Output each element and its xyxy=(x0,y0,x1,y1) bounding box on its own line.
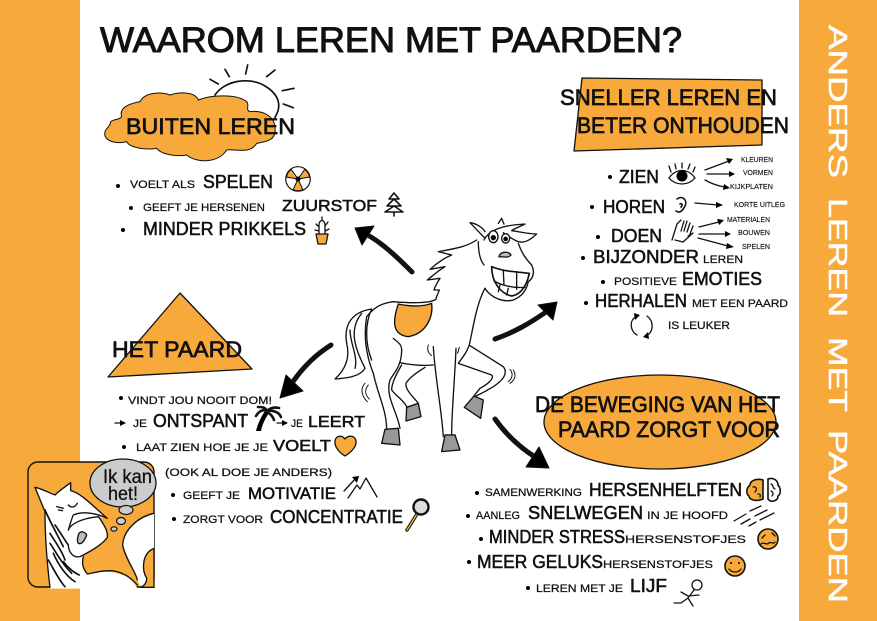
item: doen xyxy=(596,215,770,251)
item: zien: KLEUREN xyxy=(741,155,773,164)
arrow: to het paard xyxy=(280,345,331,398)
item: bijzonder leren: BIJZONDER xyxy=(593,247,699,267)
orange rounded box xyxy=(28,462,154,587)
panel: ik kan het xyxy=(28,459,156,589)
item: zien: KIJKPLATEN xyxy=(730,182,773,191)
cloud shape xyxy=(105,93,275,161)
item: horen xyxy=(590,197,785,217)
item: doen: BOUWEN xyxy=(738,228,770,237)
item: spelen: SPELEN xyxy=(203,172,273,192)
item: hersenhelften: HERSENHELFTEN xyxy=(589,480,742,500)
item: motivatie: GEEFT JE xyxy=(183,490,240,502)
item: horen: HOREN xyxy=(603,197,665,217)
item: lijf xyxy=(526,576,702,606)
item: voelt: LAAT ZIEN HOE JE JE xyxy=(136,442,268,454)
item: minder prikkels: MINDER PRIKKELS xyxy=(143,219,306,239)
item: herhalen: HERHALEN xyxy=(595,291,687,311)
item: concentratie: CONCENTRATIE xyxy=(270,507,403,527)
horse motion lines xyxy=(362,345,515,402)
vertical title: PAARDEN xyxy=(823,430,851,603)
horse saddle patch xyxy=(395,303,432,337)
vertical title xyxy=(823,25,851,603)
item: snelwegen: SNELWEGEN xyxy=(528,503,643,523)
item: zien: ZIEN xyxy=(619,167,659,187)
small horse xyxy=(35,483,154,589)
item: ontspant: ONTSPANT xyxy=(153,411,248,431)
item: doen: SPELEN xyxy=(742,242,770,251)
heading line 2: BETER ONTHOUDEN xyxy=(577,113,789,138)
item: snelwegen: AANLEG xyxy=(476,510,520,522)
item: bijzonder leren: LEREN xyxy=(703,254,743,266)
item: zuurstof: ZUURSTOF xyxy=(282,198,377,215)
item: zuurstof xyxy=(129,193,403,216)
item: positieve emoties: EMOTIES xyxy=(682,269,762,289)
vertical title: ANDERS xyxy=(823,25,851,178)
item: horen: KORTE UITLEG xyxy=(734,200,785,209)
orange quadrilateral xyxy=(574,78,762,151)
vertical title: MET xyxy=(823,337,851,412)
thought bubble: het! xyxy=(108,484,138,505)
item: herhalen xyxy=(584,291,788,339)
item: nooit dom: VINDT JOU NOOIT DOM! xyxy=(128,395,272,407)
item: snelwegen: IN JE HOOFD xyxy=(647,510,728,522)
item: minder prikkels xyxy=(121,217,329,244)
item: minder stress: HERSENSTOFJES xyxy=(625,534,746,546)
heading line 2: PAARD ZORGT VOOR xyxy=(558,417,780,442)
item: zuurstof: GEEFT JE HERSENEN xyxy=(143,202,265,214)
item: zien xyxy=(608,155,773,191)
item: hersenhelften: SAMENWERKING xyxy=(485,487,582,499)
item: zien: VORMEN xyxy=(743,168,773,177)
vertical title: LEREN xyxy=(823,198,851,317)
item: motivatie xyxy=(171,476,377,503)
title: WAAROM LEREN MET PAARDEN? xyxy=(100,21,682,60)
item: spelen: VOELT ALS xyxy=(130,179,195,191)
heading line 1: SNELLER LEREN EN xyxy=(560,85,777,110)
item: ontspant xyxy=(115,407,365,431)
right orange band xyxy=(799,0,877,621)
panel: sneller leren xyxy=(560,78,789,339)
item: spelen xyxy=(116,167,310,192)
item: ontspant: JE xyxy=(133,418,147,430)
thought bubble xyxy=(90,459,156,531)
arrow: to buiten leren xyxy=(355,226,412,272)
item: voelt xyxy=(122,436,356,456)
item: meer geluks xyxy=(467,552,745,576)
item: concentratie: ZORGT VOOR xyxy=(183,514,263,526)
horse head xyxy=(470,218,537,301)
heading line 1: DE BEWEGING VAN HET xyxy=(535,392,780,417)
arrow: to beweging xyxy=(495,419,549,468)
item: herhalen: IS LEUKER xyxy=(668,320,730,332)
panel: het paard xyxy=(108,293,428,530)
item: voelt: VOELT xyxy=(273,438,331,455)
panel: buiten leren xyxy=(105,65,403,244)
heading: HET PAARD xyxy=(112,337,242,362)
horse body outline xyxy=(365,299,436,430)
item: herhalen: MET EEN PAARD xyxy=(692,298,788,310)
icon: sun behind cloud xyxy=(210,65,294,117)
horse legs xyxy=(433,288,505,437)
panel: beweging van het paard xyxy=(466,375,780,606)
item: positieve emoties: POSITIEVE xyxy=(614,276,677,288)
item: minder stress: MINDER STRESS xyxy=(489,527,625,547)
central horse illustration xyxy=(335,218,537,452)
horse tail xyxy=(335,309,372,379)
item: ontspant: JE xyxy=(291,418,303,430)
orange ellipse xyxy=(544,375,776,469)
item: hersenhelften xyxy=(475,478,780,501)
item: concentratie xyxy=(172,500,428,530)
item: snelwegen xyxy=(466,503,774,526)
thought bubble: Ik kan xyxy=(103,467,152,488)
horse mane xyxy=(427,240,477,298)
item: doen: DOEN xyxy=(611,226,662,246)
item: lijf: LIJF xyxy=(630,576,667,596)
orange triangle xyxy=(108,293,252,377)
item: positieve emoties xyxy=(601,269,762,289)
item: meer geluks: HERSENSTOFJES xyxy=(603,559,713,571)
item: motivatie: MOTIVATIE xyxy=(248,484,336,503)
horse hooves xyxy=(382,396,483,452)
item: lijf: LEREN MET JE xyxy=(536,583,623,595)
note: (OOK AL DOE JE ANDERS) xyxy=(165,467,332,479)
heading: BUITEN LEREN xyxy=(126,114,295,139)
arrow: to sneller leren xyxy=(495,302,557,339)
white page area under belly xyxy=(80,572,137,589)
item: meer geluks: MEER GELUKS xyxy=(477,552,603,572)
item: minder stress xyxy=(479,527,778,549)
item: bijzonder leren xyxy=(581,247,743,267)
item: ontspant: LEERT xyxy=(308,414,365,431)
left orange band xyxy=(0,0,80,621)
item: doen: MATERIALEN xyxy=(727,215,770,224)
